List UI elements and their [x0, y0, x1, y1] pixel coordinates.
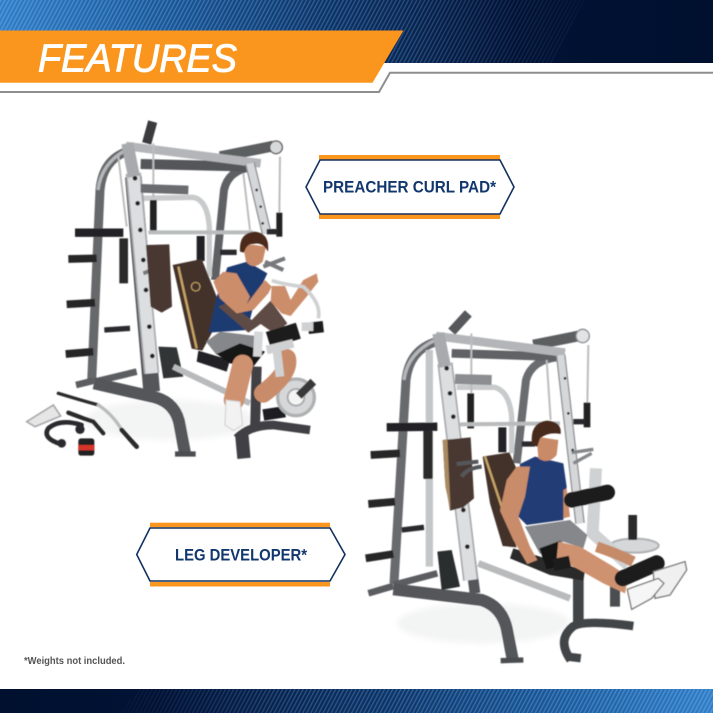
bench seat: [197, 351, 230, 372]
title banner: [0, 30, 404, 83]
silver leg arm: [593, 468, 628, 565]
side pad: [423, 431, 433, 479]
bench back pad: [173, 259, 217, 351]
footnote: *Weights not included.: [24, 656, 125, 667]
weight plate: [278, 379, 314, 416]
header gray rule: [0, 73, 713, 92]
bench rail: [173, 367, 250, 403]
accessory: rope: [47, 422, 85, 448]
weight stack: [437, 550, 460, 590]
base stand: [237, 367, 310, 458]
person: head: [240, 232, 268, 266]
accessory: tricep handle: [27, 405, 61, 427]
person: front leg: [557, 542, 628, 593]
frame holes: [133, 176, 264, 358]
footer band: [0, 689, 713, 713]
gym photo: preacher curl setup: [27, 122, 323, 458]
frame holes: [444, 366, 574, 549]
label text: LEG DEVELOPER*: [175, 546, 308, 564]
accessory: lat bar: [58, 393, 137, 447]
accessory: ankle strap: [78, 438, 94, 456]
bench stand: [564, 577, 633, 662]
gym photo: leg developer setup: [366, 313, 687, 662]
person: legs and shorts: [206, 332, 287, 431]
side pad: [119, 238, 128, 283]
label: preacher curl pad: [306, 155, 514, 219]
right side pad: [197, 236, 205, 261]
upper rollers: [572, 492, 607, 500]
top pulley: [270, 141, 282, 154]
accessory: straight handle: [68, 413, 103, 433]
person: shorts: [525, 520, 587, 554]
person: compression sleeve: [539, 541, 561, 569]
person: arms: [500, 467, 570, 564]
roller and pad support: [257, 327, 323, 377]
person: torso: [209, 262, 267, 333]
weight plate: [610, 515, 659, 553]
title: FEATURES: [38, 38, 237, 80]
top pulley: [576, 329, 589, 343]
person: torso: [515, 457, 567, 525]
header band: [0, 0, 713, 63]
curl bar: [272, 281, 319, 318]
right side pad: [498, 427, 506, 452]
person: head: [532, 421, 561, 461]
gym frame: [66, 122, 285, 454]
preacher pad: [218, 301, 287, 334]
bench back pad: [483, 452, 520, 547]
person: rear leg: [597, 547, 633, 562]
bench rail: [478, 563, 570, 598]
label: leg developer: [137, 523, 345, 586]
seat roller: [553, 562, 570, 565]
label text: PREACHER CURL PAD*: [323, 178, 497, 196]
shoes: [627, 562, 687, 609]
bench seat: [510, 548, 585, 581]
rear back pad: [443, 437, 474, 511]
person: arms: [213, 272, 318, 316]
pad arm: [457, 462, 482, 477]
weight storage base: [158, 347, 183, 378]
gym frame: [366, 313, 615, 661]
rear back pad: [146, 244, 172, 313]
lower rollers: [623, 563, 657, 578]
